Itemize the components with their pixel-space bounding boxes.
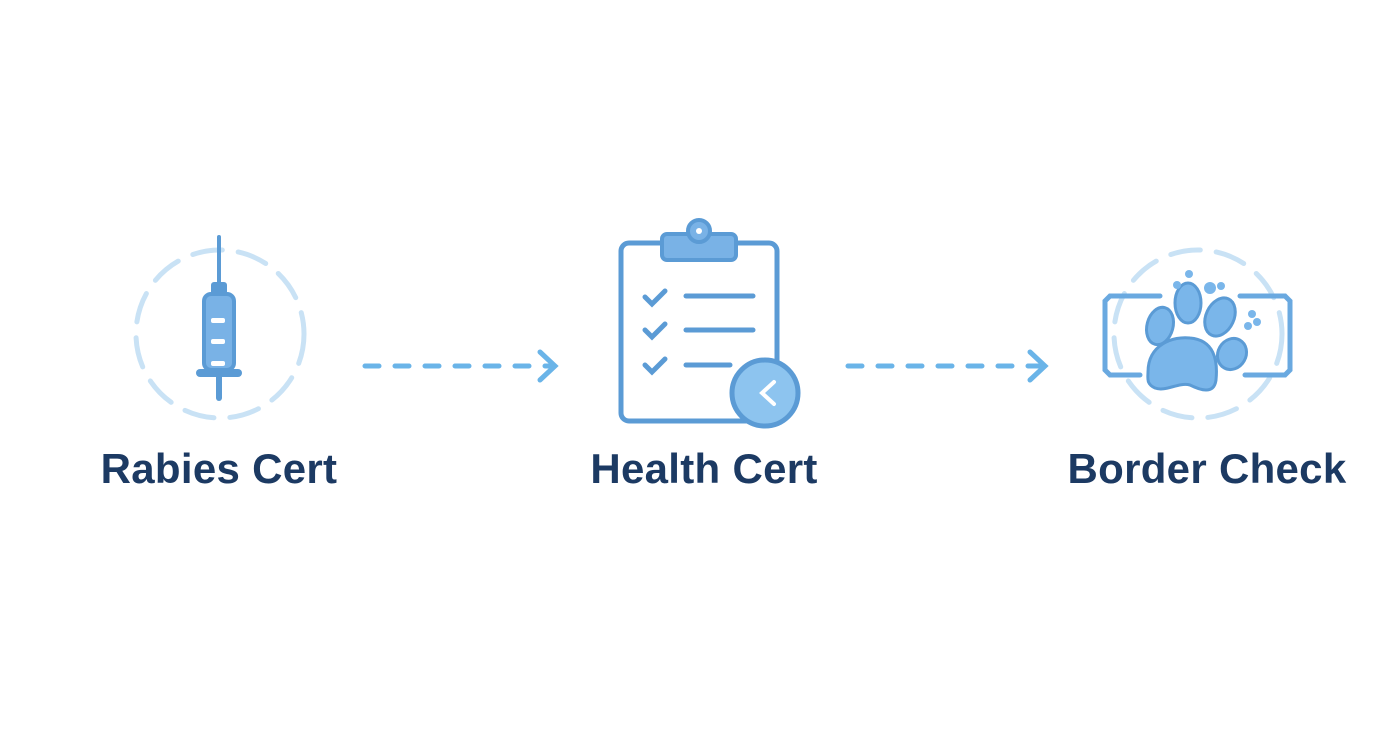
label: Border Check: Border Check — [1067, 445, 1347, 492]
step: border check — [1067, 250, 1347, 492]
icon: clipboard — [621, 220, 798, 426]
label: Rabies Cert: Rabies Cert — [101, 445, 337, 492]
step: rabies cert — [101, 237, 337, 492]
label: Health Cert: Health Cert — [590, 445, 818, 492]
icon: paw in frame — [1105, 250, 1290, 418]
arrow 2 — [848, 352, 1045, 380]
icon: syringe in dashed circle — [136, 237, 304, 418]
arrow 1 — [365, 352, 555, 380]
step: health cert — [590, 220, 818, 492]
